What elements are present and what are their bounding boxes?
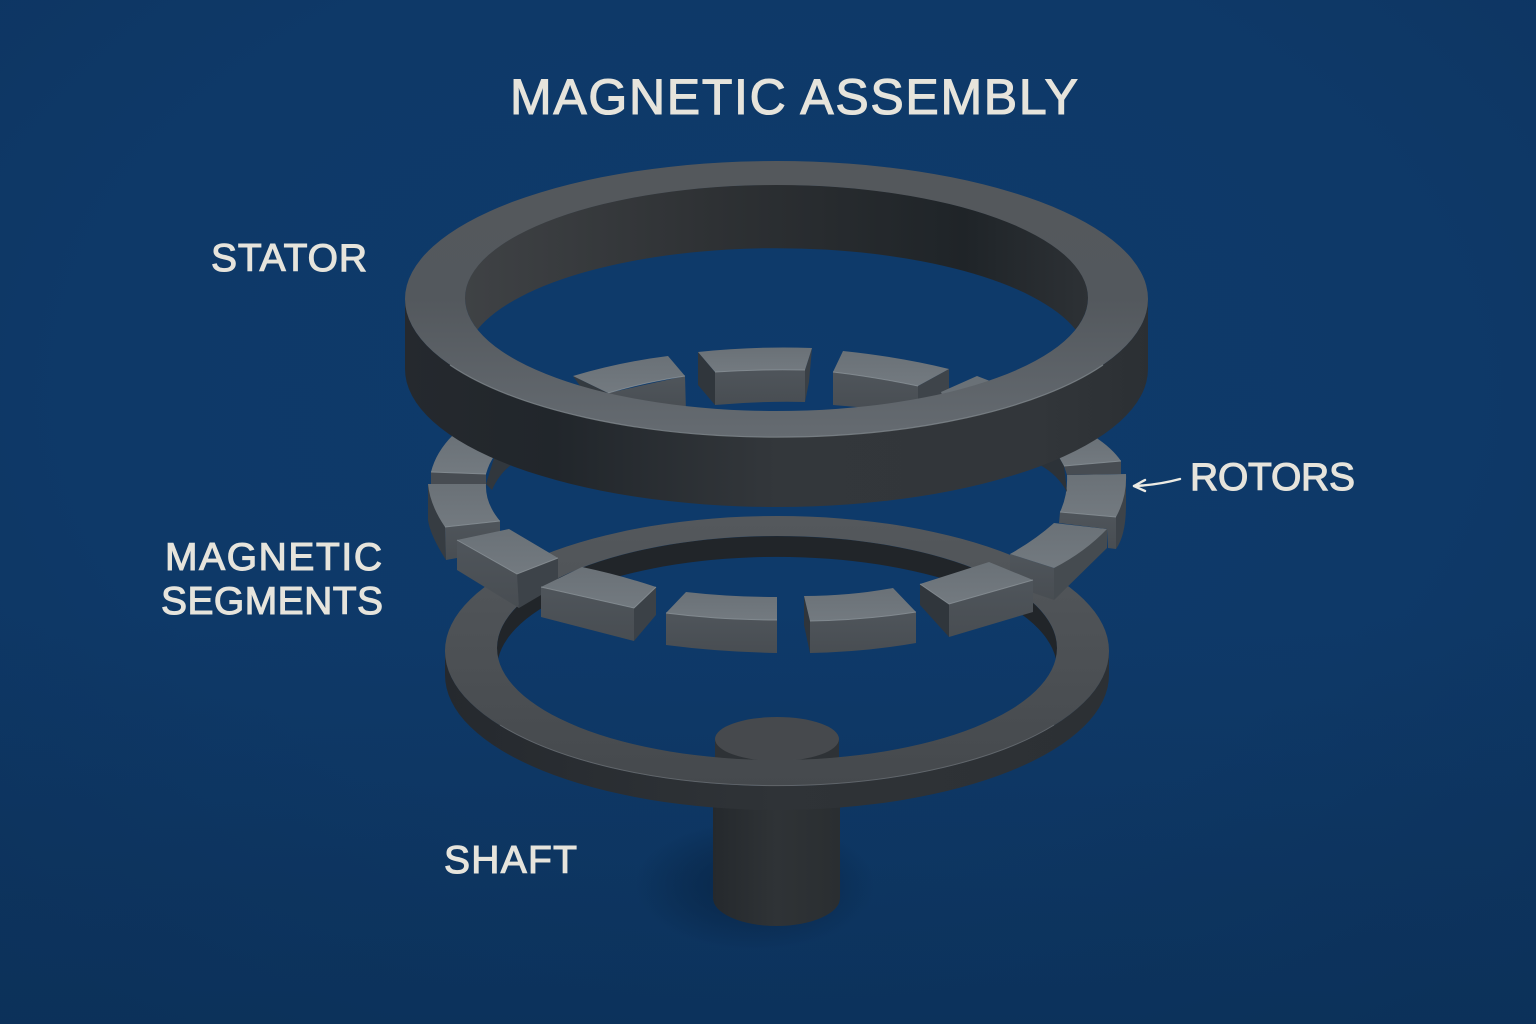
segment: upper right (1040, 437, 1121, 492)
label: magnetic segments (161, 536, 383, 623)
segment: upper left (431, 435, 514, 490)
shaft cylinder (713, 795, 840, 926)
magnetic segments ring (428, 348, 1126, 653)
segment: front right outer (920, 562, 1033, 637)
stator inner wall (465, 185, 1088, 330)
label: rotors: ROTORS (1190, 456, 1355, 499)
shaft top disc (715, 717, 839, 765)
segment: front right inner (804, 588, 916, 653)
lower ring (445, 516, 1109, 810)
segment: back left (573, 356, 686, 412)
segment: back right (833, 351, 949, 412)
ring outer side wall (445, 651, 1109, 810)
label: shaft: SHAFT (444, 839, 577, 882)
label: stator: STATOR (211, 237, 367, 280)
shaft shadow (635, 820, 875, 950)
segment: left (428, 484, 500, 560)
stator outer side wall (405, 299, 1148, 507)
segment: front left inner (666, 592, 777, 653)
stator top face (405, 161, 1148, 437)
ring inner wall (497, 536, 1057, 658)
ring front highlight (500, 725, 1054, 786)
stator front highlight (450, 365, 1103, 437)
stator ring (405, 161, 1148, 507)
segment: lower left (457, 529, 558, 608)
title: MAGNETIC ASSEMBLY (510, 69, 1078, 125)
segment: right (1059, 474, 1126, 549)
shaft (635, 795, 875, 950)
ring top face (445, 516, 1109, 786)
segment: back centre (698, 348, 812, 405)
segment: back far right (941, 376, 990, 402)
arrow: rotors pointer (1134, 479, 1180, 491)
segment: front left outer (541, 567, 656, 641)
segment edge highlights (431, 370, 1121, 621)
label: magnetic segments: SEGMENTS (161, 580, 383, 623)
label: magnetic segments: MAGNETIC (165, 536, 382, 579)
segment: lower right (1010, 523, 1107, 600)
